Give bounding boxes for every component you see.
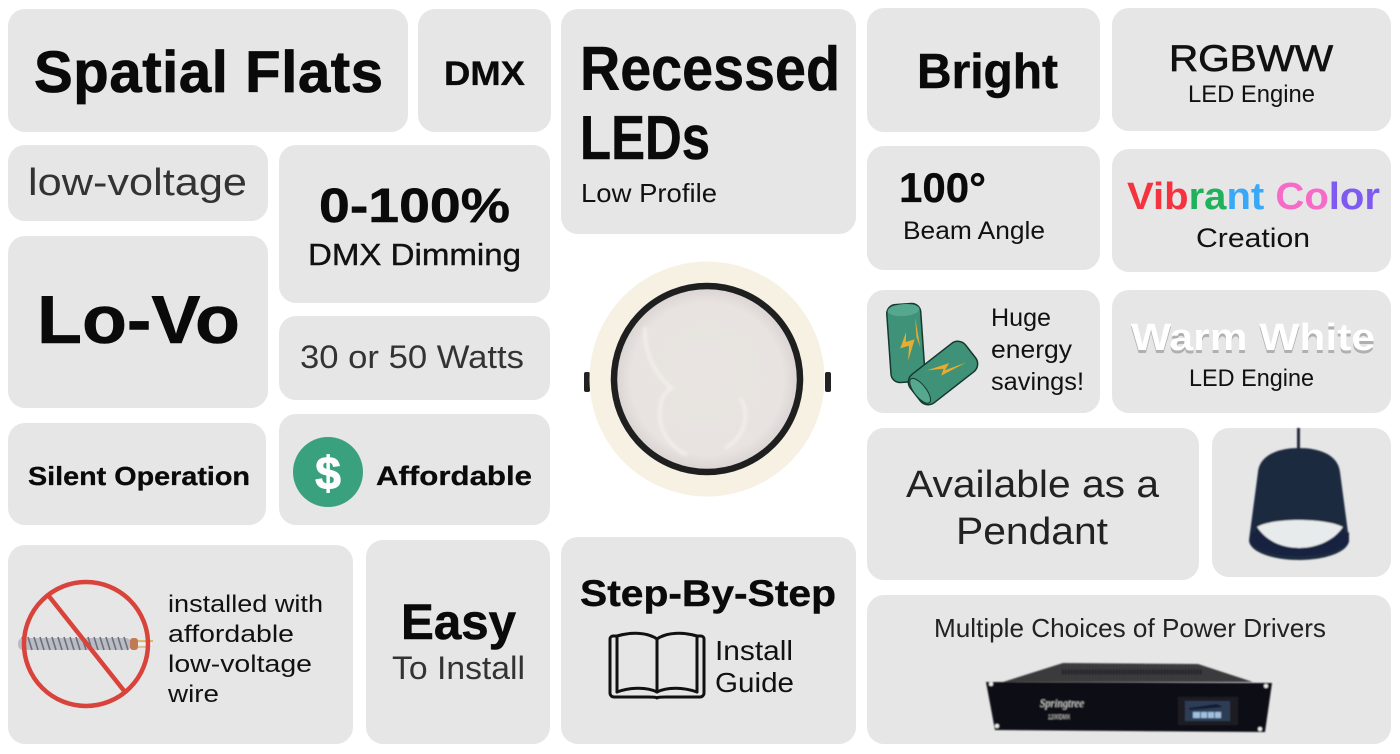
panel: DMX dimming: DMX Dimming — [308, 237, 521, 272]
panel: power drivers — [867, 595, 1391, 744]
panel: vibrant color — [1112, 149, 1391, 272]
panel: Spatial Flats title — [8, 9, 408, 132]
icon: dollar coin: $ — [315, 447, 341, 499]
panel: energy savings: energy — [991, 336, 1073, 364]
panel: DMX: DMX — [444, 55, 525, 93]
panel: affordable: Affordable — [376, 461, 532, 491]
panel: Lo-Vo: Lo-Vo — [37, 282, 240, 358]
panel: RGBWW LED Engine: LED Engine — [1188, 81, 1315, 108]
panel: Bright — [867, 8, 1100, 132]
panel: step-by-step guide: Step-By-Step — [580, 573, 836, 614]
text: wire description: affordable — [168, 621, 294, 648]
panel: easy to install: Easy — [401, 594, 516, 650]
panel: step-by-step guide: Install — [715, 635, 793, 666]
panel: energy savings: Huge — [991, 304, 1051, 332]
product photo: recessed light — [584, 262, 831, 496]
text: wire description: wire — [167, 681, 219, 708]
icon: batteries — [886, 303, 982, 409]
panel: RGBWW LED Engine: RGBWW — [1169, 38, 1333, 79]
panel: Recessed LEDs: LEDs — [580, 104, 710, 173]
panel: easy to install — [366, 540, 550, 744]
icon: power driver unit: Springtree — [1040, 696, 1085, 710]
panel: Recessed LEDs: Low Profile — [581, 178, 717, 208]
icon: dollar coin — [293, 437, 363, 507]
panel: Spatial Flats title: Spatial Flats — [34, 40, 383, 105]
panel: low-voltage — [8, 145, 268, 221]
panel: Recessed LEDs: Recessed — [580, 35, 840, 104]
panel: DMX — [418, 9, 551, 132]
panel: affordable — [279, 414, 550, 525]
panel: beam angle — [867, 146, 1100, 270]
panel: warm white: Warm White — [1131, 317, 1375, 359]
icon: crossed-out armored cable — [18, 582, 153, 706]
icon: pendant lamp — [1249, 428, 1349, 560]
panel: step-by-step guide — [561, 537, 856, 744]
panel: available as pendant: Available as a — [906, 464, 1160, 506]
panel: warm white: Warm White — [1131, 320, 1375, 362]
panel: beam angle: 100° — [899, 164, 986, 211]
panel: easy to install: To Install — [392, 650, 525, 686]
panel: vibrant color: Creation — [1196, 223, 1310, 253]
panel: pendant photo — [1212, 428, 1391, 577]
panel: Lo-Vo — [8, 236, 268, 408]
panel: DMX dimming: 0-100% — [319, 180, 510, 233]
panel: low-voltage wire — [8, 545, 353, 744]
panel: Bright: Bright — [917, 45, 1058, 99]
text: wire description: installed with — [168, 591, 323, 618]
icon: power driver unit — [986, 663, 1272, 732]
icon: power driver unit: 1200DMX — [1048, 715, 1070, 721]
panel: power drivers: Multiple Choices of Power Drivers — [934, 613, 1326, 643]
panel: RGBWW LED Engine — [1112, 8, 1391, 131]
panel: DMX dimming — [279, 145, 550, 303]
panel: energy savings — [867, 290, 1100, 413]
text: wire description: low-voltage — [168, 651, 312, 678]
panel: silent operation: Silent Operation — [28, 461, 250, 491]
icon: open book — [610, 633, 704, 698]
panel: vibrant color: Vibrant Color — [1127, 176, 1380, 218]
panel: wattage — [279, 316, 550, 400]
panel: low-voltage: low-voltage — [28, 162, 247, 204]
panel: warm white: LED Engine — [1189, 365, 1314, 392]
panel: silent operation — [8, 423, 266, 525]
panel: available as pendant — [867, 428, 1199, 580]
panel: energy savings: savings! — [991, 368, 1084, 396]
panel: Recessed LEDs — [561, 9, 856, 234]
panel: beam angle: Beam Angle — [903, 217, 1045, 245]
panel: available as pendant: Pendant — [956, 511, 1108, 553]
panel: warm white — [1112, 290, 1391, 413]
panel: wattage: 30 or 50 Watts — [300, 339, 524, 375]
panel: step-by-step guide: Guide — [715, 667, 794, 698]
text: wire description — [167, 591, 323, 708]
